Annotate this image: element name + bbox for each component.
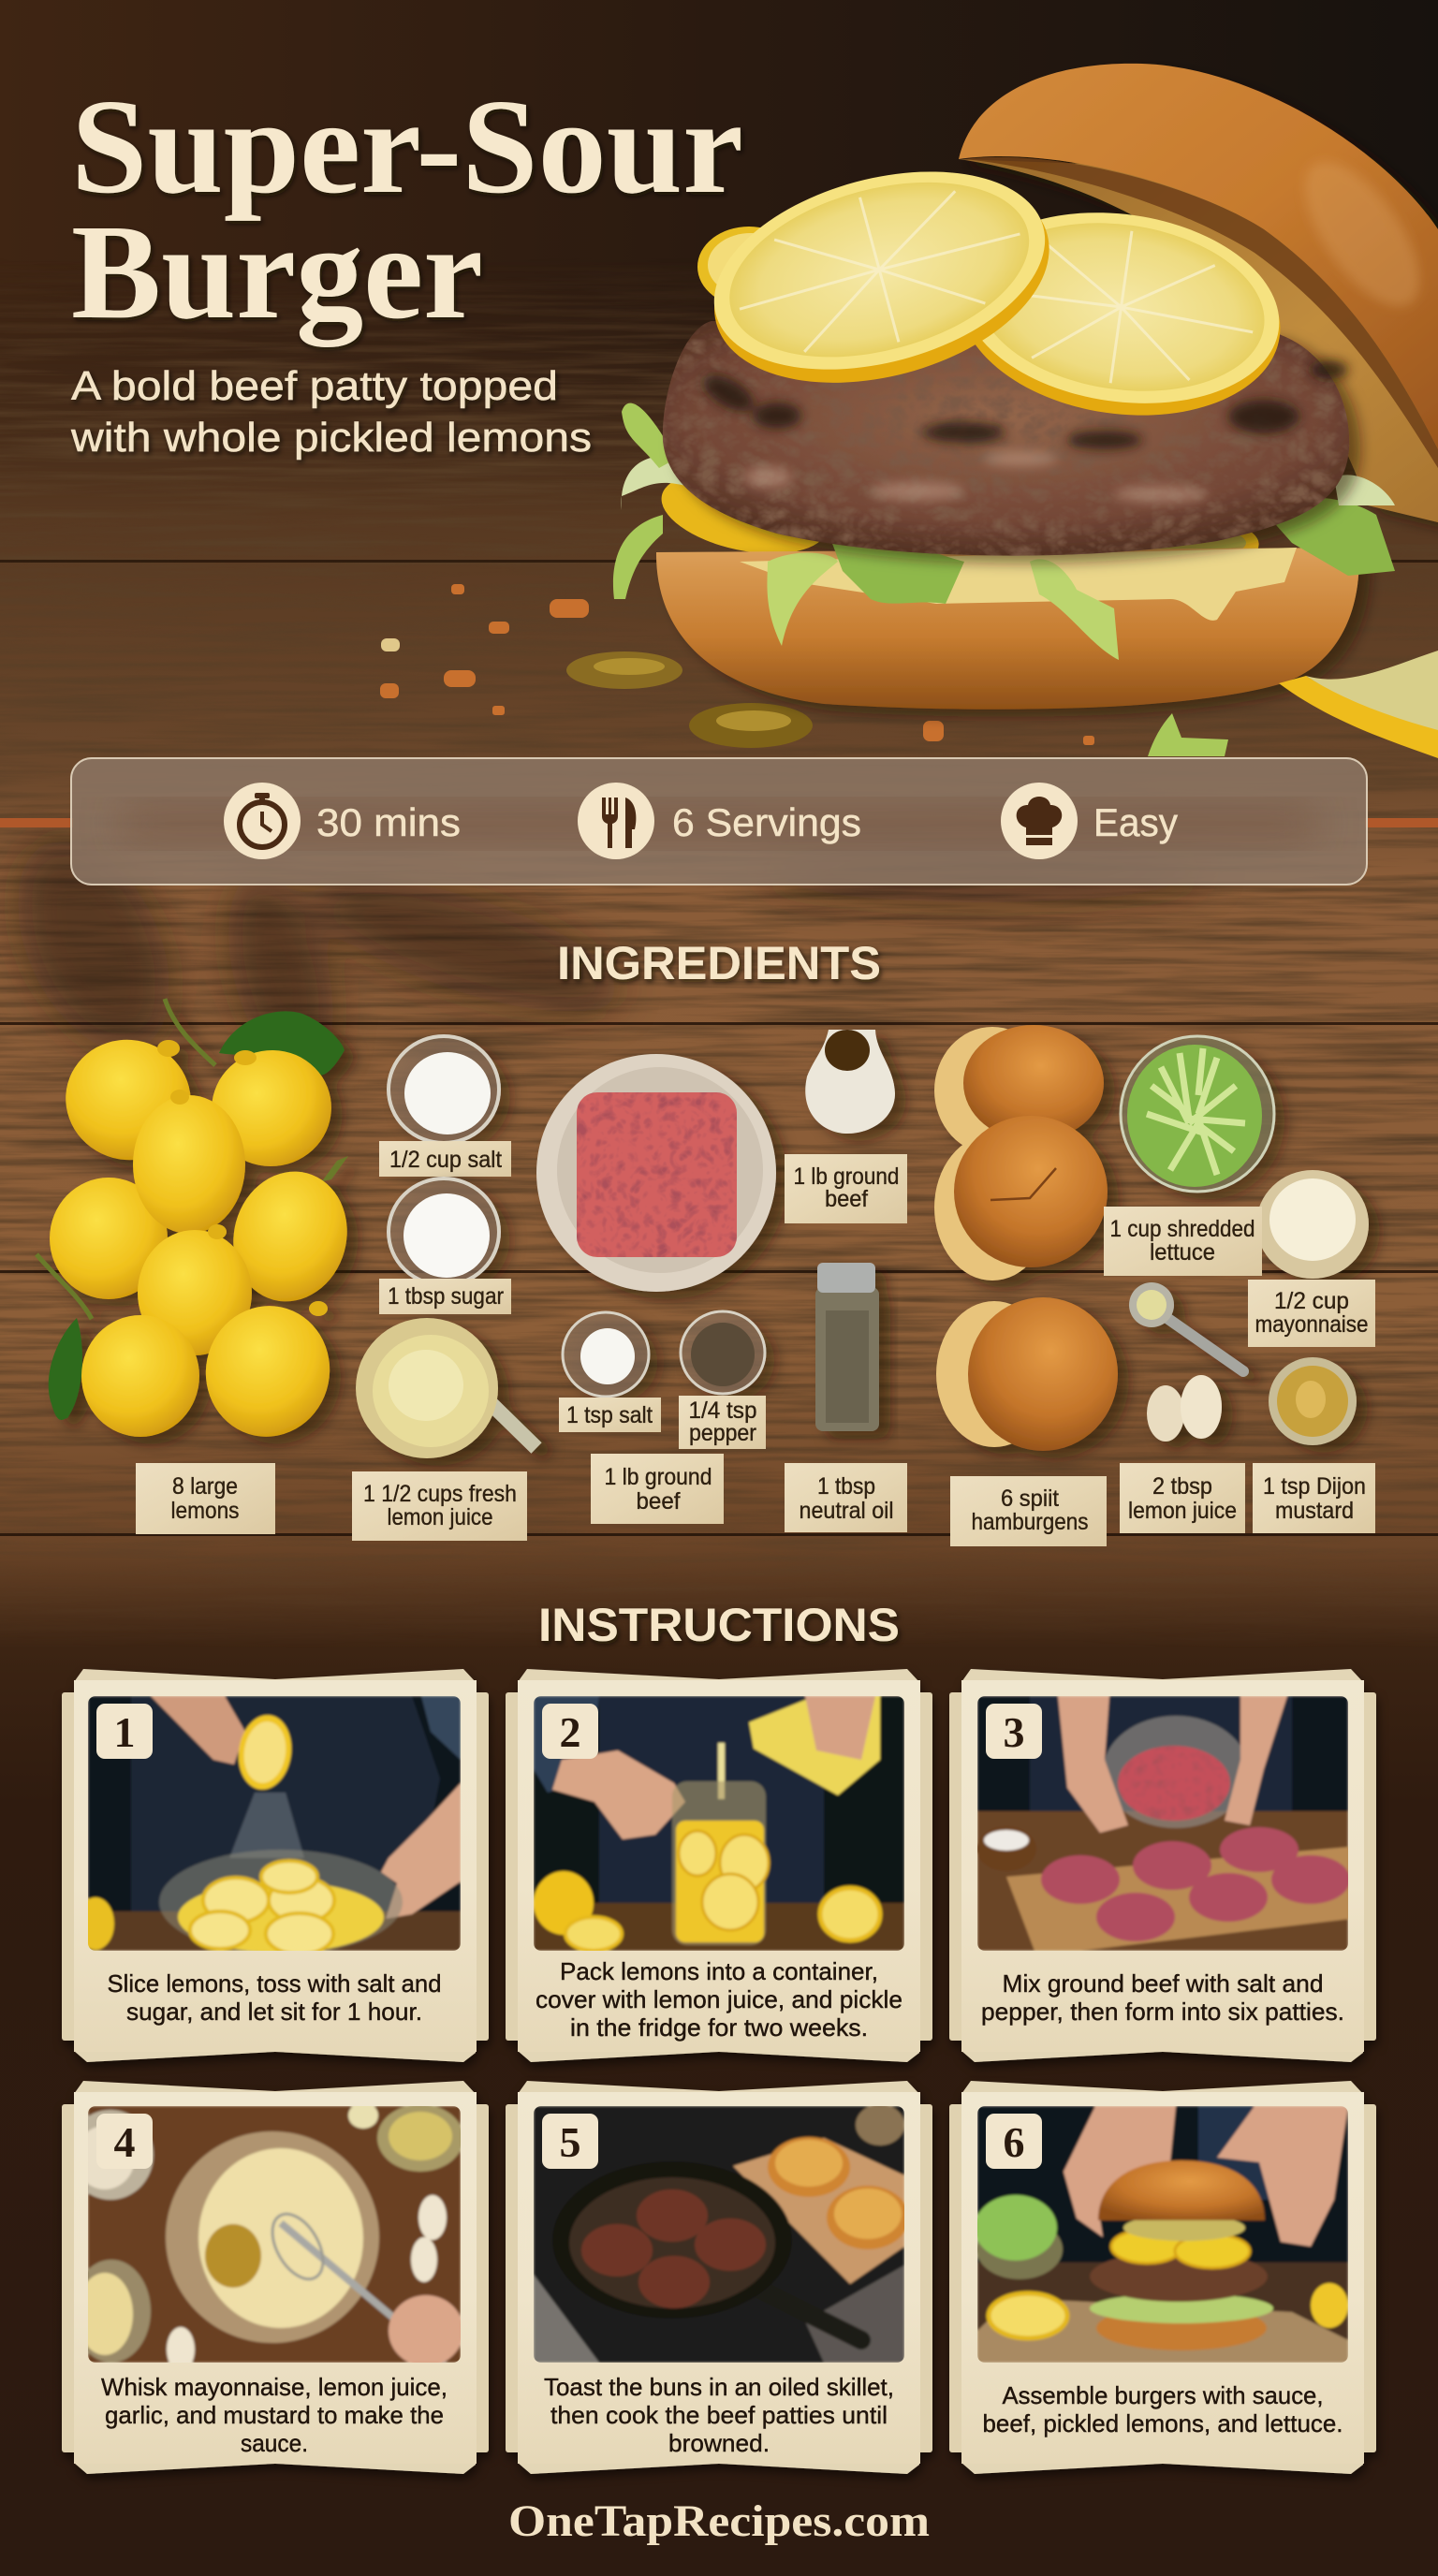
- icon: mayonnaise jar: [1256, 1170, 1369, 1279]
- photo: cooking patties: [534, 2104, 909, 2363]
- icon: mustard dish: [1269, 1357, 1357, 1445]
- step text: Mix ground beef with salt and: [1002, 1969, 1324, 1998]
- ingredient label: [379, 1141, 511, 1177]
- title: Super-Sour: [71, 72, 743, 222]
- ingredient label: [1104, 1207, 1262, 1276]
- icon: measuring jug of lemon juice: [356, 1318, 536, 1458]
- ingredient label: 1/2 cup: [1274, 1288, 1349, 1314]
- icon: puddles and crumbs: [380, 584, 1094, 748]
- ingredient label: 1 lb ground: [605, 1464, 712, 1490]
- icon: pepper shaker: [815, 1263, 879, 1431]
- step text: Whisk mayonnaise, lemon juice,: [101, 2373, 448, 2401]
- icon: garlic: [1147, 1375, 1222, 1442]
- step text: [983, 2381, 1343, 2437]
- ingredient label: mustard: [1275, 1498, 1354, 1524]
- text: difficulty: Easy: [1093, 800, 1178, 844]
- ingredient label: [559, 1398, 661, 1432]
- badge: number 6: 6: [1004, 2118, 1024, 2166]
- badge: number 1: 1: [114, 1708, 135, 1756]
- ingredient label: [1253, 1463, 1375, 1533]
- step text: garlic, and mustard to make the: [105, 2401, 444, 2429]
- ingredient label: lemon juice: [1128, 1498, 1237, 1524]
- icon: pile of lemons: [37, 999, 361, 1448]
- ingredient label: [785, 1154, 907, 1223]
- step text: [107, 1969, 442, 2026]
- ingredient label: [591, 1454, 724, 1524]
- ingredient label: [136, 1463, 275, 1534]
- info bar: [71, 758, 1367, 885]
- photo: assembling burger: [975, 2106, 1348, 2363]
- step text: [536, 1957, 902, 2042]
- badge: number 4: [96, 2114, 153, 2169]
- ingredient label: 1 tbsp: [817, 1473, 875, 1500]
- step text: [101, 2373, 448, 2457]
- step text: [981, 1969, 1344, 2026]
- step text: [544, 2373, 894, 2457]
- step text: sugar, and let sit for 1 hour.: [126, 1998, 422, 2026]
- ingredient label: [379, 1279, 511, 1314]
- step text: Assemble burgers with sauce,: [1002, 2381, 1324, 2409]
- icon: lettuce scrap: [1148, 713, 1228, 756]
- ingredient label: 8 large: [172, 1473, 238, 1500]
- ingredient label: [1248, 1280, 1375, 1347]
- badge: number 6: [986, 2114, 1042, 2169]
- ingredient label: 1/2 cup salt: [389, 1147, 502, 1173]
- badge: number 2: [542, 1704, 598, 1759]
- photo: pickling lemons: [534, 1696, 904, 1951]
- ingredient label: [950, 1476, 1107, 1546]
- badge: number 5: 5: [560, 2118, 580, 2166]
- icon: plate of ground beef: [536, 1054, 776, 1292]
- ingredient label: 2 tbsp: [1152, 1473, 1212, 1500]
- ingredient label: [1120, 1463, 1245, 1533]
- icon: mayo sauce: [740, 548, 1297, 621]
- icon: beef patty: [663, 321, 1349, 556]
- ingredient label: neutral oil: [800, 1498, 893, 1524]
- badge: number 2: 2: [560, 1708, 580, 1756]
- icon: small bowl of pepper: [681, 1311, 765, 1394]
- icon: bowl of lettuce: [1121, 1036, 1274, 1192]
- ingredient label: hamburgens: [972, 1509, 1088, 1535]
- panel: step 6 card: [949, 2081, 1376, 2474]
- panel: step 5 card: [506, 2081, 932, 2474]
- step text: then cook the beef patties until: [550, 2401, 888, 2429]
- step text: Toast the buns in an oiled skillet,: [544, 2373, 894, 2401]
- icon: bottom bun: [656, 548, 1359, 710]
- step text: cover with lemon juice, and pickle: [536, 1985, 902, 2013]
- hero burger illustration: [380, 64, 1438, 758]
- ingredient label: 6 spiit: [1001, 1486, 1059, 1512]
- ingredient label: 1 cup shredded: [1110, 1216, 1255, 1242]
- photo: slicing lemons: [77, 1696, 461, 1954]
- subtitle: A bold beef patty topped: [71, 363, 558, 409]
- icon: small white jug: [805, 1030, 895, 1134]
- ingredient label: beef: [637, 1488, 681, 1515]
- icon: hamburger buns: [934, 1025, 1118, 1451]
- decorative accent stripes: [0, 818, 1438, 827]
- footer: website: OneTapRecipes.com: [508, 2496, 930, 2546]
- title: Burger: [71, 198, 483, 347]
- step text: Pack lemons into a container,: [560, 1957, 878, 1985]
- icon: lettuce: [613, 403, 1395, 660]
- step text: pepper, then form into six patties.: [981, 1998, 1344, 2026]
- icon: lemon wedge: [1279, 651, 1438, 758]
- step text: Slice lemons, toss with salt and: [107, 1969, 442, 1998]
- icon: bowl of salt: [389, 1036, 499, 1143]
- icon: back lemon slice: [697, 227, 800, 307]
- photo: forming patties: [976, 1696, 1350, 1951]
- text: servings: 6 Servings: [672, 800, 861, 844]
- icon: lower lemons: [654, 459, 1262, 594]
- ingredient label: 1 lb ground: [794, 1164, 899, 1190]
- badge: number 3: [986, 1704, 1042, 1759]
- step text: sauce.: [241, 2429, 308, 2457]
- panel: step 1 card: [62, 1669, 489, 2062]
- ingredient label: [679, 1396, 766, 1449]
- panel: step 3 card: [949, 1669, 1376, 2062]
- subtitle: with whole pickled lemons: [70, 415, 592, 461]
- icon: lemon slice right: [946, 193, 1294, 435]
- step text: browned.: [668, 2429, 770, 2457]
- panel: step 4 card: [62, 2081, 489, 2474]
- ingredient label: 1 tsp Dijon: [1263, 1473, 1366, 1500]
- photo: whisking sauce: [88, 2106, 461, 2363]
- panel: ingredients: [37, 999, 1375, 1546]
- badge: number 1: [96, 1704, 153, 1759]
- icon: top bun: [959, 64, 1438, 522]
- heading: ingredients: INGREDIENTS: [557, 937, 881, 989]
- icon: chef hat: [1001, 783, 1078, 859]
- panel: step 2 card: [506, 1669, 932, 2062]
- text: time: 30 mins: [316, 800, 461, 844]
- badge: number 4: 4: [114, 2118, 135, 2166]
- ingredient label: [785, 1463, 907, 1532]
- ingredient label: [352, 1471, 527, 1541]
- ingredient label: 1 tsp salt: [566, 1402, 653, 1428]
- icon: lemon slice big: [690, 138, 1072, 417]
- ingredient label: mayonnaise: [1255, 1311, 1369, 1338]
- ingredient label: 1 1/2 cups fresh: [363, 1481, 517, 1507]
- ingredient label: lemon juice: [388, 1504, 492, 1530]
- subtitle: [70, 363, 592, 461]
- title: [71, 72, 743, 347]
- page background: [0, 0, 1438, 1754]
- ingredient label: beef: [825, 1186, 868, 1212]
- badge: number 3: 3: [1004, 1708, 1024, 1756]
- icon: stopwatch: [224, 783, 301, 859]
- ingredient label: lemons: [170, 1498, 240, 1524]
- ingredient label: 1/4 tsp: [689, 1398, 756, 1424]
- icon: fork and knife: [578, 783, 654, 859]
- heading: instructions: INSTRUCTIONS: [538, 1599, 900, 1651]
- step text: in the fridge for two weeks.: [570, 2013, 868, 2042]
- step text: beef, pickled lemons, and lettuce.: [983, 2409, 1343, 2437]
- ingredient label: lettuce: [1150, 1239, 1215, 1266]
- icon: measuring spoon: [1129, 1282, 1243, 1371]
- ingredient label: 1 tbsp sugar: [388, 1283, 504, 1310]
- badge: number 5: [542, 2114, 598, 2169]
- icon: small bowl of salt: [563, 1312, 649, 1397]
- icon: bowl of sugar: [389, 1178, 499, 1285]
- ingredient label: pepper: [689, 1420, 756, 1446]
